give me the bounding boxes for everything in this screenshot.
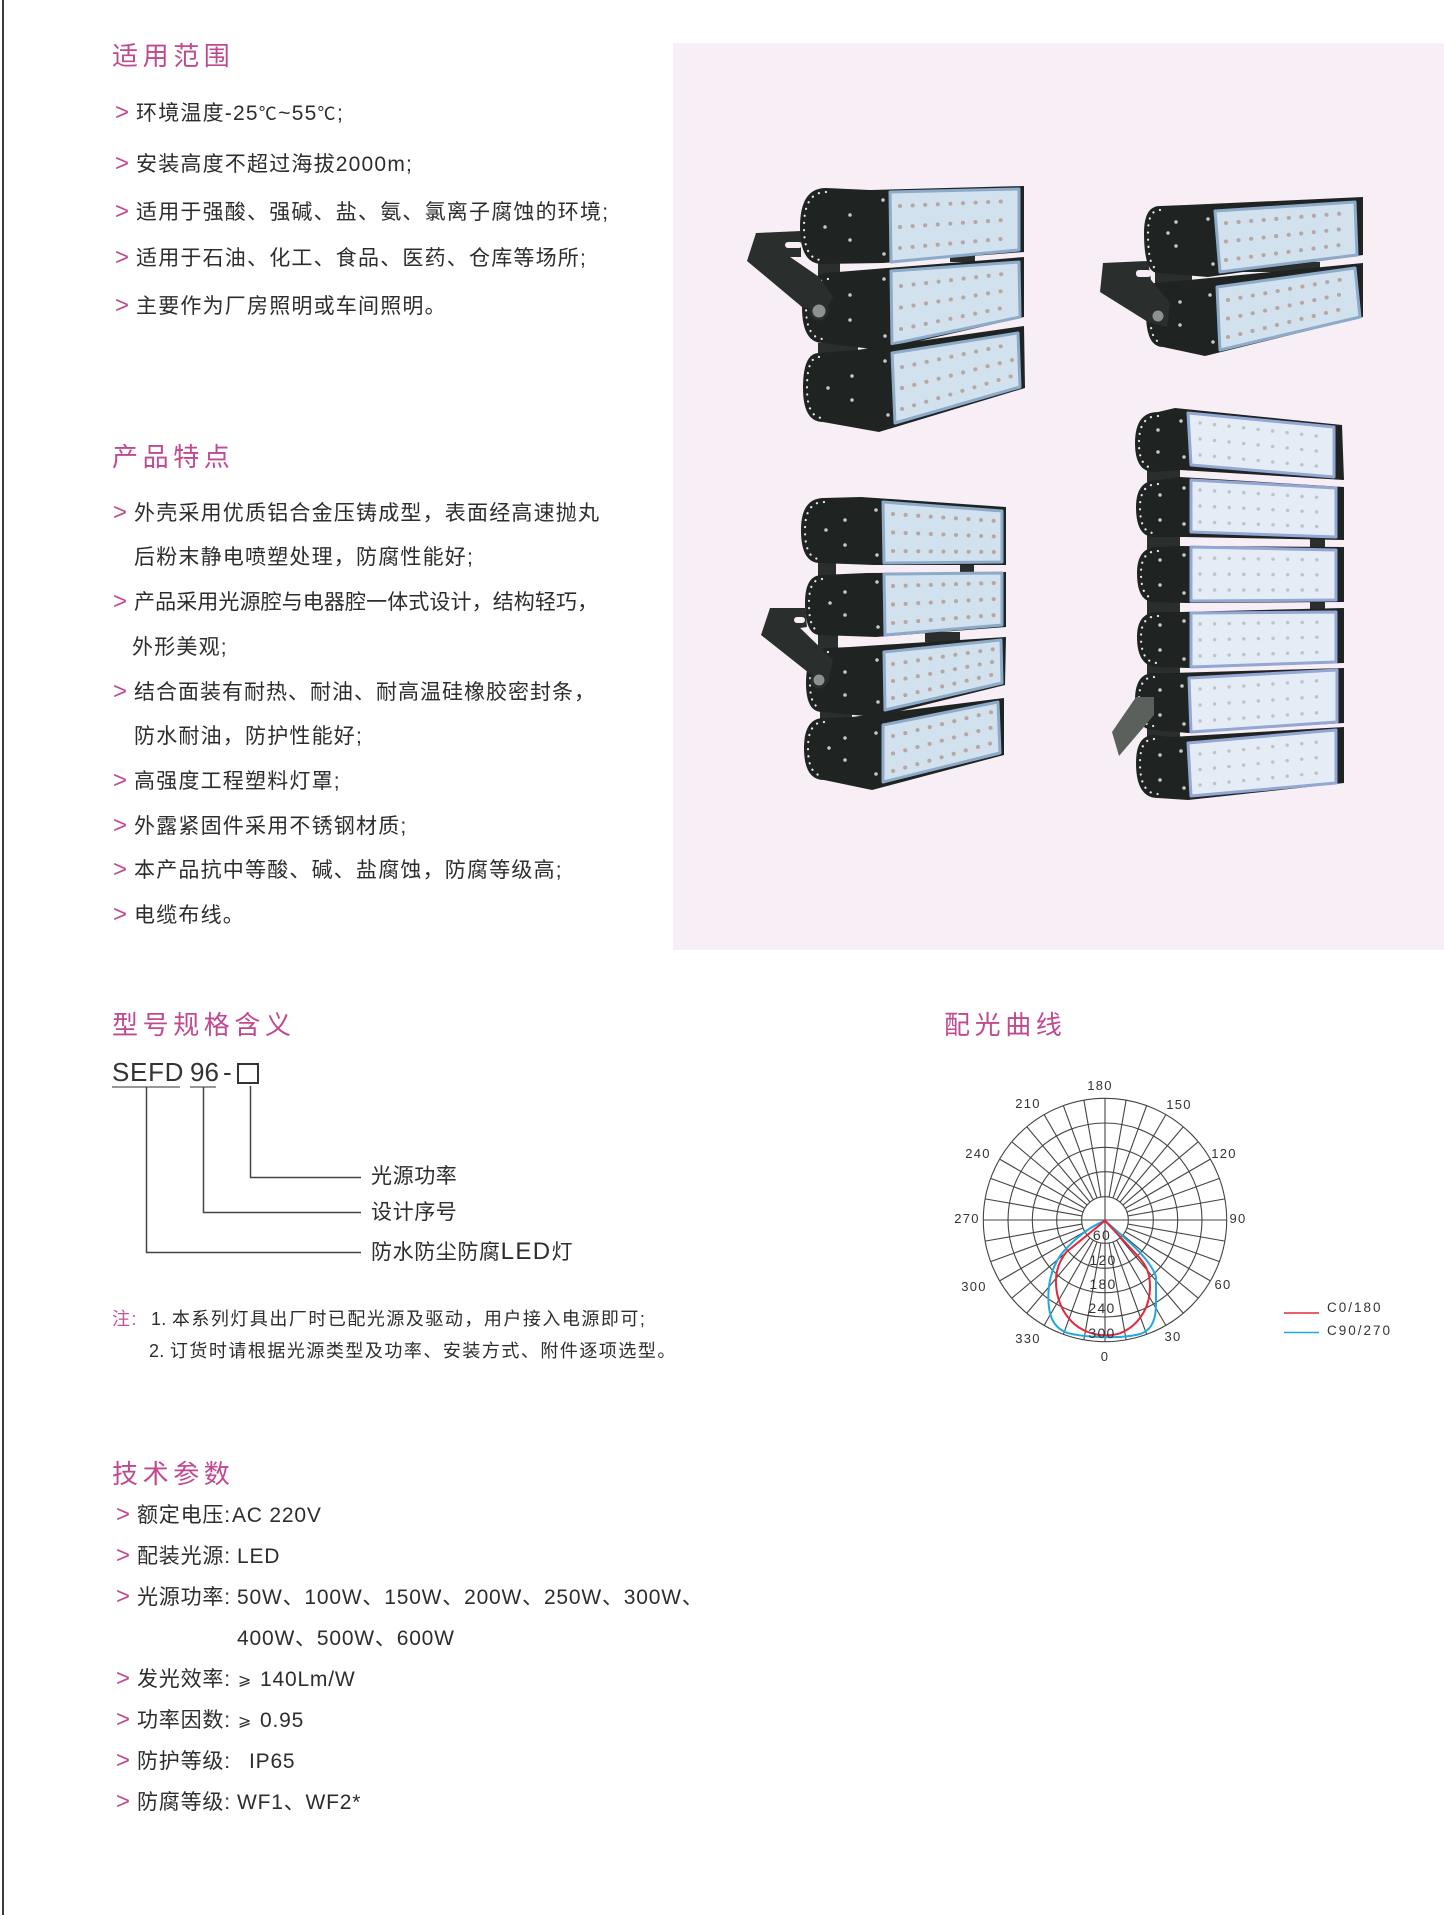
section: application scope: > (115, 292, 129, 319)
model code diagram: - (223, 1057, 232, 1087)
heading: product features: 产品特点 (112, 442, 234, 472)
section: product features: > (113, 499, 127, 526)
polar chart: 30 (1164, 1329, 1182, 1344)
section: product features: > (113, 767, 127, 794)
polar chart: 330 (1015, 1331, 1041, 1346)
feature: stainless fasteners: 外露紧固件采用不锈钢材质; (134, 815, 407, 838)
feature: integrated design continued: 外形美观; (132, 636, 228, 659)
feature: housing continued: 后粉末静电喷塑处理，防腐性能好; (134, 546, 474, 569)
polar chart: 300 (961, 1279, 987, 1294)
polar chart: 60 (1093, 1227, 1111, 1243)
model code diagram: SEFD (112, 1057, 184, 1087)
polar chart: 300 (1088, 1325, 1116, 1341)
feature: corrosion grade: 本产品抗中等酸、碱、盐腐蚀，防腐等级高; (134, 859, 563, 882)
polar chart: 90 (1229, 1211, 1247, 1226)
section: technical parameters: > (116, 1583, 130, 1610)
model code diagram (112, 1057, 361, 1254)
feature: lamp cover: 高强度工程塑料灯罩; (134, 770, 341, 793)
heading: technical parameters: 技术参数 (112, 1459, 234, 1489)
section: product features: > (113, 856, 127, 883)
parameter: luminous efficacy (116, 1665, 355, 1692)
panel: product photo background (673, 43, 1444, 950)
heading: light distribution curve: 配光曲线 (944, 1010, 1066, 1040)
list item: main use: 主要作为厂房照明或车间照明。 (136, 295, 447, 318)
polar chart: 120 (1211, 1146, 1237, 1161)
heading: application scope: 适用范围 (112, 41, 234, 71)
parameter: light source: LED (237, 1545, 280, 1568)
polar chart (954, 1078, 1392, 1364)
label: design number: 设计序号 (371, 1201, 457, 1224)
section: technical parameters: > (116, 1542, 130, 1569)
section: technical parameters: > (116, 1665, 130, 1692)
list item: industries: 适用于石油、化工、食品、医药、仓库等场所; (136, 247, 587, 270)
heading: model meaning: 型号规格含义 (112, 1010, 296, 1040)
note marker: 注: (112, 1309, 138, 1329)
section: application scope (112, 41, 609, 319)
label: waterproof dustproof anticorrosion LED lamp: 防水防尘防腐LED灯 (371, 1238, 573, 1265)
section: product features: > (113, 588, 127, 615)
parameter: power factor: ⩾ (238, 1711, 252, 1730)
parameter: rated voltage: AC 220V (232, 1504, 322, 1527)
parameter: light source (116, 1542, 280, 1569)
parameter: power factor: 功率因数: (137, 1709, 231, 1732)
parameter: power factor: 0.95 (260, 1709, 304, 1732)
section: application scope: > (115, 99, 129, 126)
parameter: corrosion rating: WF1、WF2* (237, 1791, 361, 1814)
section: application scope: > (115, 150, 129, 177)
parameter: power options (116, 1583, 704, 1610)
lamp: six modules (1112, 408, 1344, 800)
note 2: 2. 订货时请根据光源类型及功率、安装方式、附件逐项选型。 (149, 1341, 677, 1361)
feature: cable wiring: 电缆布线。 (134, 904, 245, 927)
section: product features: > (113, 678, 127, 705)
polar chart: 180 (1089, 1276, 1117, 1292)
list item: temperature: 环境温度-25℃~55℃; (136, 102, 344, 125)
polar chart: 240 (1088, 1300, 1116, 1316)
parameter: luminous efficacy: 发光效率: (137, 1668, 231, 1691)
section: technical parameters: > (116, 1501, 130, 1528)
label: light source power: 光源功率 (371, 1165, 457, 1188)
parameter: protection rating: IP65 (249, 1750, 295, 1773)
polar chart: 60 (1214, 1277, 1232, 1292)
section: model meaning (112, 1010, 677, 1361)
section: light distribution curve (944, 1010, 1392, 1364)
parameter: power options: 光源功率: (137, 1586, 231, 1609)
polar chart: 0 (1101, 1349, 1109, 1364)
parameter: protection rating (116, 1747, 295, 1774)
lamp: two modules (1100, 197, 1363, 356)
parameter: light source: 配装光源: (137, 1545, 231, 1568)
model code diagram: 96 (190, 1057, 219, 1087)
feature: sealing strip: 结合面装有耐热、耐油、耐高温硅橡胶密封条， (134, 681, 596, 704)
parameter: power factor (116, 1706, 304, 1733)
section: application scope: > (115, 198, 129, 225)
note 1: 1. 本系列灯具出厂时已配光源及驱动，用户接入电源即可; (151, 1309, 646, 1329)
list item: altitude: 安装高度不超过海拔2000m; (136, 153, 413, 176)
feature: housing: 外壳采用优质铝合金压铸成型，表面经高速抛丸 (134, 502, 600, 525)
parameter: protection rating: 防护等级: (137, 1750, 231, 1773)
parameter: power options: 50W、100W、150W、200W、250W、300W、 (237, 1586, 704, 1609)
parameter: power options continued: 400W、500W、600W (237, 1627, 455, 1650)
parameter: luminous efficacy: ⩾ (238, 1670, 252, 1689)
feature: sealing continued: 防水耐油，防护性能好; (134, 725, 363, 748)
parameter: corrosion rating: 防腐等级: (137, 1791, 231, 1814)
parameter: rated voltage (116, 1501, 322, 1528)
lamp: four modules (761, 497, 1006, 790)
section: application scope: > (115, 244, 129, 271)
polar chart: 240 (965, 1146, 991, 1161)
parameter: luminous efficacy: 140Lm/W (260, 1668, 355, 1691)
section: product features: > (113, 901, 127, 928)
polar chart: 210 (1015, 1096, 1041, 1111)
parameter: rated voltage: 额定电压: (137, 1504, 231, 1527)
section: product features: > (113, 812, 127, 839)
section: product features (112, 442, 600, 928)
lamp: three modules (747, 186, 1025, 432)
list item: corrosive environments: 适用于强酸、强碱、盐、氨、氯离子腐蚀的环境; (136, 201, 609, 224)
section: technical parameters: > (116, 1747, 130, 1774)
feature: integrated design: 产品采用光源腔与电器腔一体式设计，结构轻巧， (134, 591, 598, 614)
section: technical parameters (112, 1459, 704, 1815)
section: technical parameters: > (116, 1788, 130, 1815)
polar chart: 150 (1166, 1097, 1192, 1112)
section: technical parameters: > (116, 1706, 130, 1733)
left page border line (2, 0, 4, 1915)
polar chart: C0/180 (1327, 1300, 1383, 1315)
parameter: corrosion rating (116, 1788, 361, 1815)
polar chart: 120 (1089, 1252, 1117, 1268)
polar chart: 180 (1087, 1078, 1113, 1093)
polar chart: 270 (954, 1211, 980, 1226)
polar chart: C90/270 (1327, 1323, 1392, 1338)
